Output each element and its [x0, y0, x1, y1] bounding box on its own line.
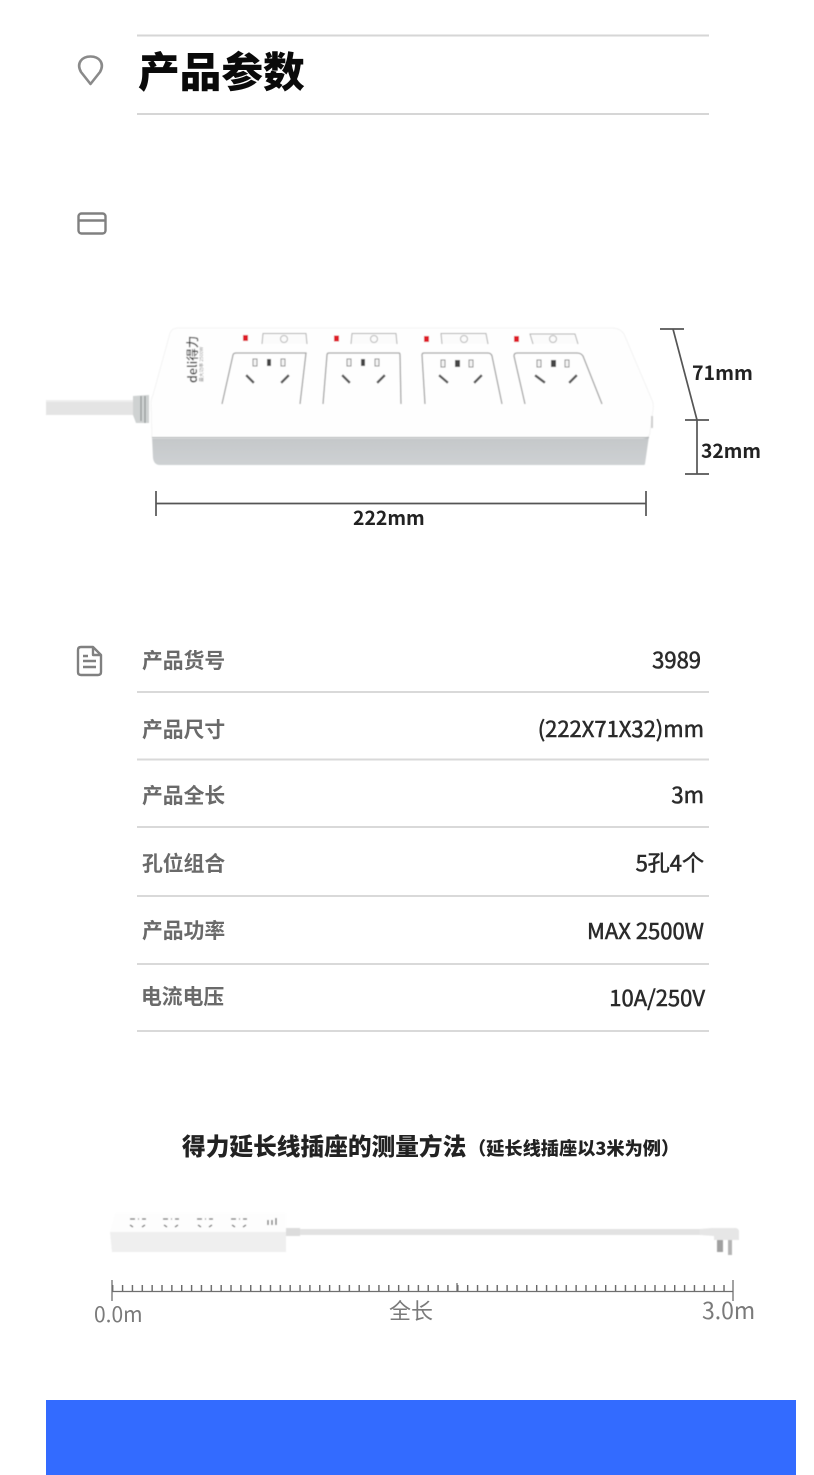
- row labels: 产品尺寸: [142, 713, 225, 743]
- buttons: [262, 334, 578, 344]
- title: 产品参数: [138, 40, 305, 100]
- row values: (222X71X32)mm: [538, 712, 704, 744]
- cord collar: [133, 395, 149, 423]
- dimension: width: [156, 491, 646, 516]
- row labels: 孔位组合: [142, 847, 225, 877]
- row values: MAX 2500W: [587, 914, 704, 946]
- strip white top: [151, 328, 653, 438]
- strip grey side: [152, 436, 649, 465]
- logo: deli得力: [182, 336, 201, 383]
- row values: [538, 643, 705, 1013]
- label: 32mm: 32mm: [701, 436, 761, 464]
- row labels: 产品全长: [142, 779, 225, 809]
- measuring method heading: [182, 1128, 679, 1162]
- blue footer band: [46, 1400, 796, 1475]
- icon: location pin: [79, 56, 102, 84]
- label: 222mm: 222mm: [353, 502, 425, 531]
- measuring method heading: （延长线插座以3米为例）: [468, 1135, 679, 1161]
- row values: 3m: [671, 778, 704, 810]
- ruler labels: [94, 1292, 755, 1329]
- long cord: [286, 1229, 702, 1235]
- table rules: [137, 692, 709, 1031]
- small strip body: [110, 1213, 286, 1232]
- product image: power strip: [46, 328, 653, 465]
- spec table: [137, 643, 709, 1031]
- small strip outlets: [130, 1218, 276, 1227]
- icon: card: [78, 214, 106, 234]
- dimension: height and depth: [660, 329, 709, 474]
- row values: 10A/250V: [609, 981, 705, 1013]
- ruler labels: 3.0m: [702, 1292, 755, 1326]
- ruler labels: 全长: [389, 1294, 433, 1326]
- row values: 5孔4个: [636, 846, 704, 878]
- socket holes: [247, 359, 576, 382]
- row labels: 电流电压: [141, 980, 224, 1010]
- measuring method heading: 得力延长线插座的测量方法: [182, 1128, 467, 1162]
- ruler labels: 0.0m: [94, 1299, 143, 1329]
- icon: document: [78, 647, 101, 675]
- length ruler: [112, 1280, 733, 1301]
- plug: [700, 1228, 739, 1240]
- row labels: 产品功率: [142, 914, 225, 944]
- row labels: [141, 644, 225, 1010]
- indicator lights: [243, 335, 519, 342]
- row labels: 产品货号: [142, 644, 225, 674]
- header rules: [137, 36, 709, 114]
- small strip and cord illustration: [110, 1213, 739, 1255]
- row values: 3989: [652, 643, 701, 675]
- logo: 最大功率 2500W: [198, 346, 205, 382]
- label: 71mm: 71mm: [692, 357, 753, 386]
- sockets: [222, 353, 602, 404]
- power cord: [46, 400, 136, 415]
